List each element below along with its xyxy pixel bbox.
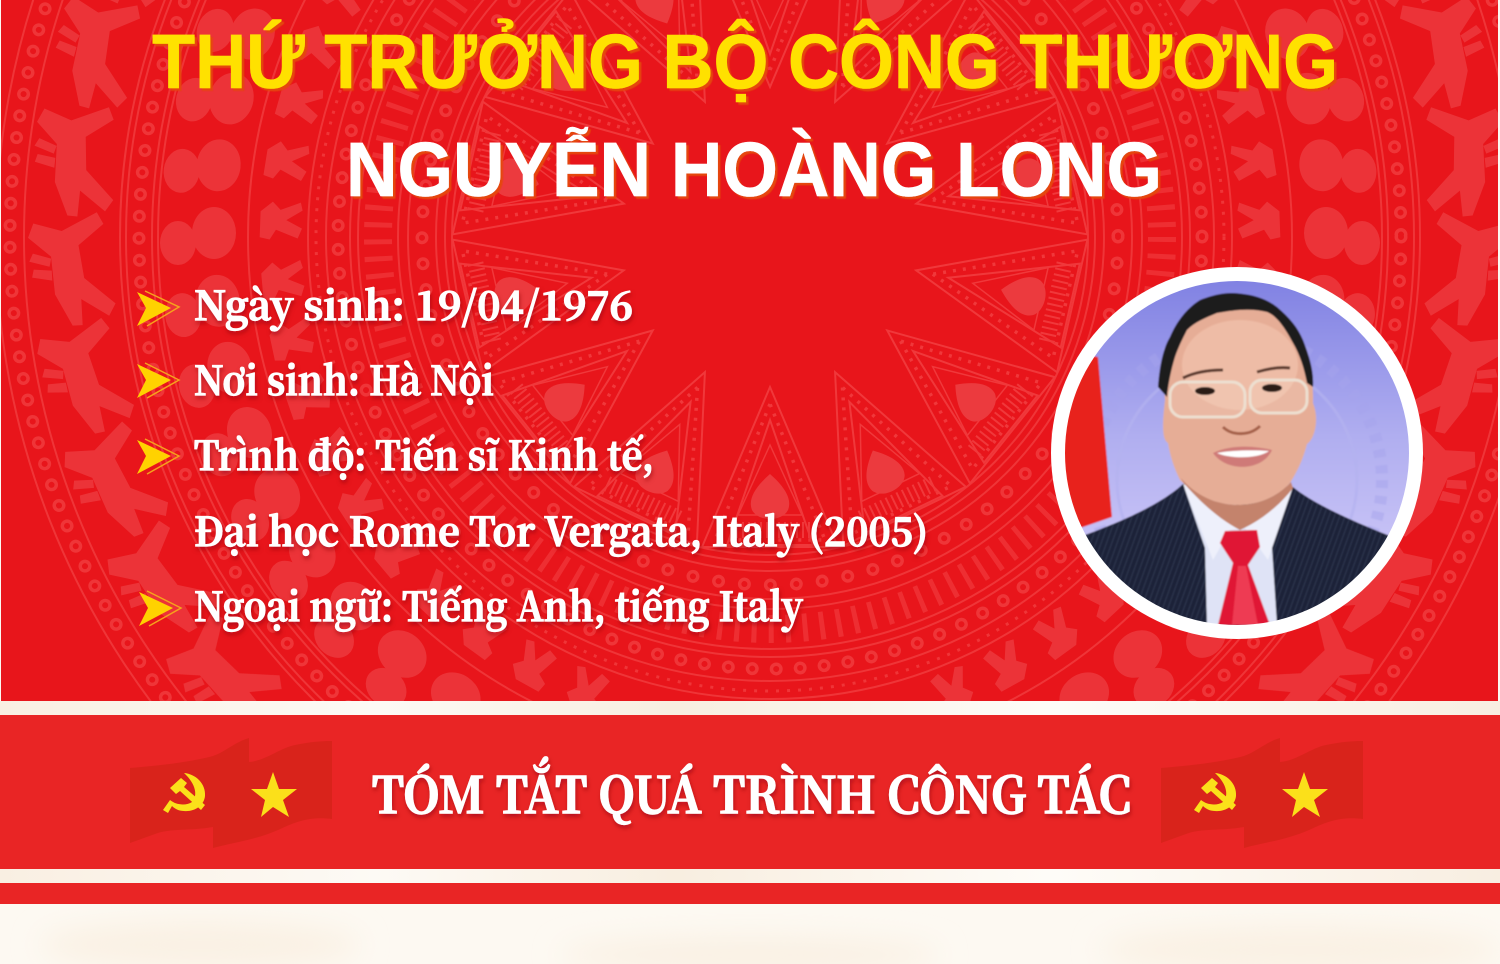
title: name: NGUYỄN HOÀNG LONG [346, 126, 1162, 213]
text: education [194, 425, 928, 558]
bullet: languages [139, 591, 181, 626]
heading: TÓM TẮT QUÁ TRÌNH CÔNG TÁC [372, 756, 1131, 828]
heading band [0, 715, 1500, 869]
text: place of birth: Nơi sinh: Hà Nội [194, 350, 494, 407]
text: date of birth: Ngày sinh: 19/04/1976 [194, 275, 633, 332]
flag: right [1161, 738, 1363, 848]
title: position: THỨ TRƯỞNG BỘ CÔNG THƯƠNG [152, 18, 1338, 105]
text: languages: Ngoại ngữ: Tiếng Anh, tiếng Italy [194, 576, 804, 633]
bullet: education [137, 439, 179, 474]
flag: left [130, 738, 332, 848]
thin red stripe [0, 883, 1500, 904]
background: red hero with drum pattern [1, 0, 1498, 701]
text: education: Trình độ: Tiến sĩ Kinh tế, [194, 425, 654, 482]
portrait in white circle [1051, 267, 1423, 640]
bullet: place of birth [137, 363, 179, 398]
bullet: date of birth [137, 291, 179, 326]
text: education: Đại học Rome Tor Vergata, Italy (2005) [194, 501, 928, 558]
bio list [137, 275, 928, 633]
lower section background [0, 701, 1500, 964]
